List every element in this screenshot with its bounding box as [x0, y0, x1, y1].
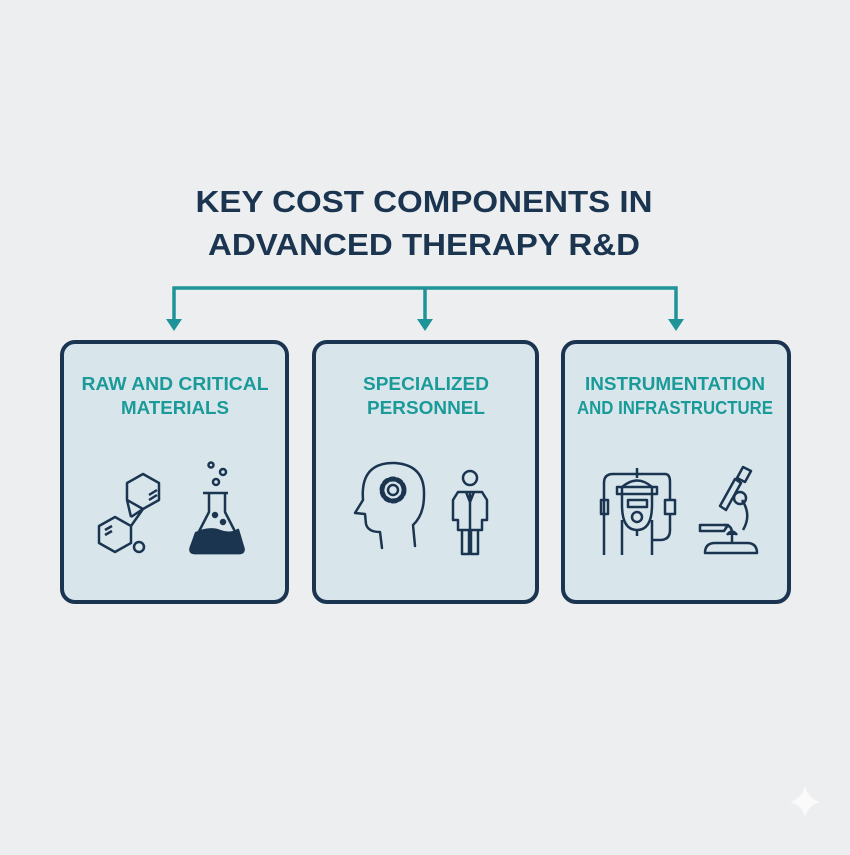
heading: personnel: SPECIALIZED	[363, 374, 489, 394]
icon: molecule	[99, 474, 159, 552]
icon: flask	[190, 462, 244, 553]
connector arrows	[166, 288, 684, 331]
icon: head with gear	[355, 463, 424, 548]
title: KEY COST COMPONENTS IN	[196, 184, 652, 219]
icon: sparkle watermark	[790, 785, 820, 818]
heading: raw materials	[82, 374, 268, 418]
heading: instrumentation	[577, 374, 773, 418]
title	[196, 184, 652, 262]
icon: person in coat	[453, 471, 487, 554]
heading: raw materials: RAW AND CRITICAL	[82, 374, 268, 394]
heading: instrumentation: AND INFRASTRUCTURE	[577, 398, 773, 418]
heading: personnel	[363, 374, 489, 418]
heading: instrumentation: INSTRUMENTATION	[585, 374, 765, 394]
heading: personnel: PERSONNEL	[367, 398, 485, 418]
heading: raw materials: MATERIALS	[121, 398, 229, 418]
panel: instrumentation and infrastructure	[563, 342, 789, 602]
panel: specialized personnel	[314, 342, 537, 602]
title: ADVANCED THERAPY R&D	[208, 227, 640, 262]
panel: raw and critical materials	[62, 342, 287, 602]
icon: microscope	[700, 467, 757, 553]
icon: bioreactor	[601, 468, 675, 555]
